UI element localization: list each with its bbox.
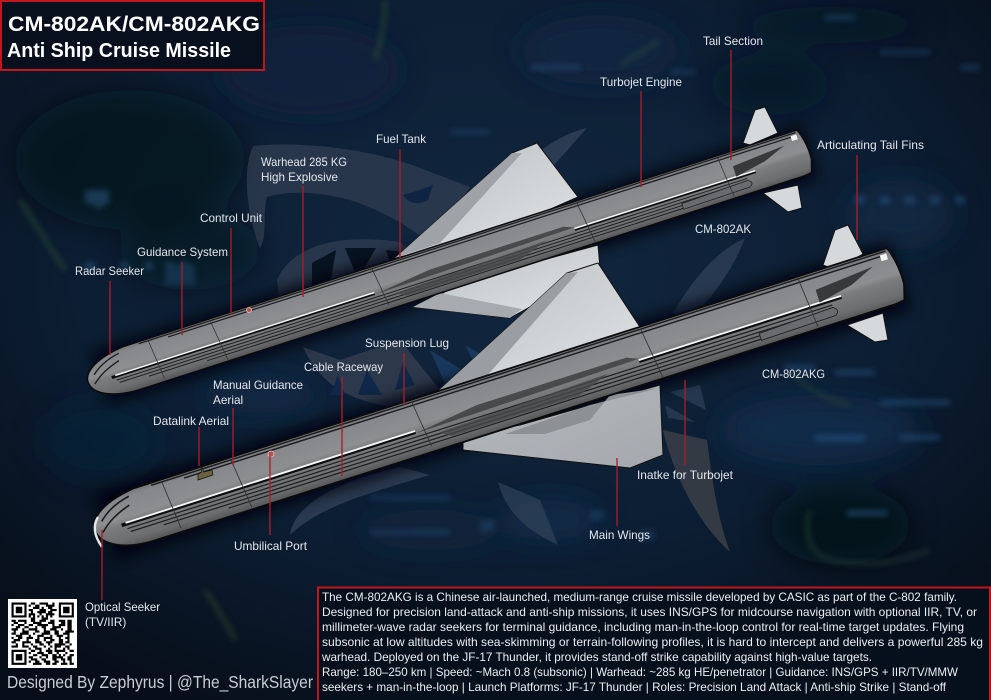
description box: subsonic at low altitudes with sea-skimming or terrain-following profiles, it is hard to intercept and delivers a powerful 285 kg [322,635,983,649]
label: Tail Section: Tail Section [703,34,763,48]
missile shadows [100,152,900,526]
label: Control Unit [200,211,263,315]
label: Turbojet Engine: Turbojet Engine [600,75,682,89]
label: Radar Seeker [75,264,144,355]
tail fins: CM-802AK [743,107,802,212]
missile body: CM-802AKG [86,246,910,557]
missile: CM-802AK [81,107,816,404]
label: Manual Guidance Aerial [213,378,303,465]
description box: Range: 180–250 km | Speed: ~Mach 0.8 (subsonic) | Warhead: ~285 kg HE/penetrator | Guidance: INS/GPS + IIR/TV/MMW [322,665,959,679]
label: Optical Seeker: (TV/IIR) [85,615,126,629]
label: Optical Seeker [85,530,160,629]
description box: Designed for precision land-attack and anti-ship missions, it uses INS/GPS for midcourse navigation with optional IIR, TV, or [322,605,977,619]
label: Turbojet Engine [600,75,682,187]
dorsal fin [520,128,587,175]
label: Articulating Tail Fins: Articulating Tail Fins [817,138,924,152]
shark head [247,145,470,248]
title box: CM-802AK/CM-802AKG [8,13,260,36]
description box: millimeter-wave radar seekers for terminal guidance, including man-in-the-loop control for real-time target updates. Flying [322,620,964,634]
label: Main Wings: Main Wings [589,528,650,542]
label: Fuel Tank: Fuel Tank [376,132,426,146]
label: Guidance System [137,245,228,335]
credit line: Designed By Zephyrus | @The_SharkSlayer [7,672,313,693]
upper main wing: CM-802AK [395,143,578,258]
label: Intake for Turbojet: Inatke for Turbojet [637,468,734,482]
title box: Anti Ship Cruise Missile [7,40,231,62]
right fin [673,238,745,320]
label: Articulating Tail Fins [817,138,924,240]
upper main wing: CM-802AKG [437,263,640,392]
label: Umbilical Port [234,456,308,553]
description box: The CM-802AKG is a Chinese air-launched, medium-range cruise missile developed by CASIC as part of the C-802 family. [322,590,957,604]
lower fin left [290,467,430,535]
optical seeker window [95,517,102,547]
label: CM-802AK: CM-802AK [695,222,751,236]
description box [318,588,990,700]
label: Umbilical Port: Umbilical Port [234,539,308,553]
label: Datalink Aerial: Datalink Aerial [153,414,229,428]
warning port: CM-802AK [247,308,251,312]
datalink aerial hardware [198,464,213,480]
label: Main Wings [589,458,650,542]
missile: CM-802AKG [86,225,910,557]
label: Warhead: Warhead 285 KG [261,155,347,169]
label: Cable Raceway: Cable Raceway [304,360,383,374]
label: Control Unit: Control Unit [200,211,263,225]
QR code [8,599,77,668]
label: Tail Section [703,34,763,160]
label: Warhead: High Explosive [261,170,338,184]
label: Intake for Turbojet [637,380,734,482]
umbilical port [268,451,274,457]
label: Warhead [261,155,347,297]
label: Cable Raceway [304,360,383,476]
label: Fuel Tank [376,132,426,258]
shark eye [403,185,433,203]
label: Manual Guidance Aerial: Aerial [213,393,243,407]
upper jaw and teeth [277,239,420,320]
lower fin right [663,430,730,552]
shark emblem watermark [247,128,745,552]
label: Manual Guidance Aerial: Manual Guidance [213,378,303,392]
label: Optical Seeker: Optical Seeker [85,600,160,614]
label: Suspension Lug: Suspension Lug [365,336,449,350]
title box [1,1,264,70]
label: Guidance System: Guidance System [137,245,228,259]
lower main wing: CM-802AK [413,245,600,318]
label: Suspension Lug [365,336,449,405]
tail fins: CM-802AKG [823,225,888,342]
label: Datalink Aerial [153,414,229,466]
missile body: CM-802AK [81,128,816,404]
lower main wing: CM-802AKG [463,385,663,468]
lower tail piece [498,482,558,545]
label: CM-802AKG: CM-802AKG [762,367,825,381]
label: Radar Seeker: Radar Seeker [75,264,144,278]
description box: seekers + man-in-the-loop | Launch Platforms: JF-17 Thunder | Roles: Precision Land Attack | Anti-ship Strike | Stand-off [322,680,947,694]
lower jaw and teeth [303,340,440,408]
description box: warhead. Deployed on the JF-17 Thunder, it provides stand-off strike capability against high-value targets. [321,650,872,664]
